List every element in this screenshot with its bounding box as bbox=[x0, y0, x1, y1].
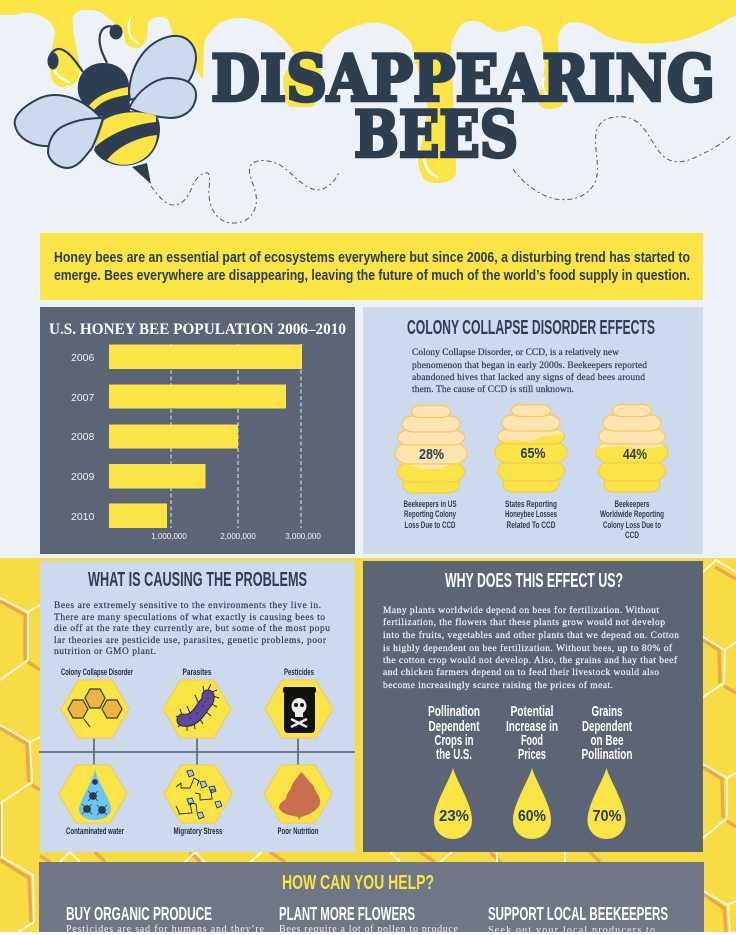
tip: buy organic produce: Pesticides are sad for humans and they’re bbox=[66, 924, 265, 935]
tip: plant more flowers: PLANT MORE FLOWERS bbox=[279, 904, 415, 924]
stat: 70%: Dependent bbox=[582, 718, 632, 735]
stat: 23%: Crops in bbox=[434, 732, 474, 749]
hive 65%: Related To CCD bbox=[506, 520, 556, 531]
stat: 70%: on Bee bbox=[590, 732, 624, 749]
bar chart bbox=[71, 344, 321, 541]
connector lines bbox=[39, 737, 355, 766]
stat: 70% bbox=[582, 703, 632, 839]
hive 65% bbox=[495, 404, 567, 531]
heading: HOW CAN YOU HELP? bbox=[282, 872, 434, 894]
cause: pesticides: Pesticides bbox=[284, 667, 314, 678]
stat: 60%: Potential bbox=[510, 703, 554, 720]
panel: what is causing the problems bbox=[39, 561, 355, 852]
hive 44% bbox=[596, 404, 668, 541]
cause: parasites bbox=[163, 667, 231, 738]
description: Colony Collapse Disorder, or CCD, is a relatively new bbox=[412, 348, 619, 358]
description: fertilization, the flowers that these plants grow would not develop bbox=[383, 617, 665, 628]
description bbox=[412, 348, 647, 395]
cause: contaminated water bbox=[59, 765, 127, 837]
title: BEES bbox=[354, 98, 518, 172]
hive 44%: Colony Loss Due to bbox=[603, 520, 661, 531]
honey highlights bbox=[54, 19, 546, 177]
hive 44%: Worldwide Reporting bbox=[600, 509, 664, 520]
bottom white strip bbox=[0, 932, 736, 935]
intro band bbox=[40, 233, 703, 300]
tip: plant more flowers bbox=[279, 904, 459, 935]
hive 44%: 44% bbox=[623, 446, 647, 463]
hive 28%: 28% bbox=[419, 446, 444, 463]
antennae bbox=[48, 24, 122, 72]
hive 28%: Loss Due to CCD bbox=[404, 520, 456, 531]
description: them. The cause of CCD is still unknown. bbox=[412, 384, 574, 395]
description bbox=[383, 605, 679, 691]
bar chart: 2009 bbox=[71, 471, 95, 483]
stat: 60% bbox=[506, 703, 558, 839]
panel: how can you help bbox=[39, 862, 704, 935]
stinger bbox=[132, 163, 151, 184]
stat: 23%: the U.S. bbox=[436, 746, 472, 763]
stat: 70%: Pollination bbox=[582, 746, 632, 763]
description: Bees are extremely sensitive to the environments they live in. bbox=[54, 601, 321, 611]
bar chart: 2006 bbox=[71, 352, 95, 364]
hive 44%: CCD bbox=[625, 530, 639, 541]
stat: 60%: Increase in bbox=[506, 718, 558, 735]
stat: 70%: Grains bbox=[592, 703, 622, 720]
description: and chicken farmers depend on to feed their livestock would also bbox=[383, 667, 659, 678]
tip: buy organic produce bbox=[66, 904, 265, 935]
cause: poor nutrition: Poor Nutrition bbox=[278, 826, 319, 837]
description: There are many speculations of what exactly is causing bees to bbox=[54, 612, 325, 623]
cause: migratory stress: Migratory Stress bbox=[174, 826, 222, 837]
wings left bbox=[15, 95, 103, 168]
bar chart: 1,000,000 bbox=[151, 532, 187, 541]
tip: plant more flowers: Bees require a lot of pollen to produce bbox=[279, 924, 459, 935]
heading: WHAT IS CAUSING THE PROBLEMS bbox=[88, 569, 307, 591]
thorax bbox=[78, 63, 130, 118]
description: become increasingly scarce raising the prices of meat. bbox=[383, 680, 613, 691]
hive 44%: Beekeepers bbox=[614, 499, 650, 510]
chart title: U.S. HONEY BEE POPULATION 2006–2010 bbox=[49, 321, 346, 338]
icon: bee bbox=[15, 24, 196, 184]
cause: colony collapse disorder bbox=[61, 667, 133, 738]
hive 65%: 65% bbox=[520, 445, 546, 462]
description: nutrition or GMO plant. bbox=[54, 647, 156, 657]
cause: parasites: Parasites bbox=[182, 667, 212, 678]
description: phenomenon that began in early 2000s. Beekeepers reported bbox=[412, 361, 647, 371]
description: Many plants worldwide depend on bees for fertilization. Without bbox=[383, 605, 659, 616]
honeycomb background bbox=[0, 558, 736, 932]
panel: bee population chart bbox=[40, 307, 355, 554]
honey drips bbox=[0, 0, 736, 183]
stat: 23%: Pollination bbox=[428, 703, 480, 720]
panel: why does this effect us bbox=[363, 561, 703, 852]
hive 28%: Reporting Colony bbox=[404, 509, 456, 520]
hive 28% bbox=[395, 406, 467, 531]
cause: contaminated water: Contaminated water bbox=[66, 826, 124, 837]
heading: WHY DOES THIS EFFECT US? bbox=[445, 570, 623, 592]
stat: 23%: Dependent bbox=[428, 718, 480, 735]
description: the cotton crop would not develop. Also, the grains and hay that beef bbox=[383, 655, 678, 666]
panel: colony collapse disorder effects bbox=[363, 307, 703, 554]
cause: poor nutrition bbox=[264, 765, 332, 837]
bar chart: 2008 bbox=[71, 431, 95, 443]
hive 65%: Honeybee Losses bbox=[505, 509, 557, 520]
stat: 60%: Prices bbox=[518, 746, 546, 763]
hive 28%: Beekeepers in US bbox=[404, 499, 456, 510]
description bbox=[54, 601, 330, 657]
abdomen bbox=[94, 111, 160, 166]
tip: support local beekeepers bbox=[488, 904, 668, 935]
wings right bbox=[129, 36, 196, 118]
cause: colony collapse disorder: Colony Collapse Disorder bbox=[61, 667, 133, 678]
bar chart: 2010 bbox=[71, 511, 95, 523]
bee flight path bbox=[151, 117, 732, 223]
description: lar theories are pesticide use, parasites, genetic problems, poor bbox=[54, 636, 327, 646]
cause: migratory stress bbox=[164, 765, 232, 837]
description: is highly dependent on bee fertilization. Without bees, up to 80% of bbox=[383, 643, 673, 654]
hive 65%: States Reporting bbox=[505, 499, 557, 510]
tip: buy organic produce: BUY ORGANIC PRODUCE bbox=[66, 904, 212, 924]
bar chart: 2007 bbox=[71, 392, 95, 404]
description: die off at the rate they currently are, but some of the most popu bbox=[54, 623, 330, 634]
stat: 60%: Food bbox=[521, 732, 543, 749]
bar chart: 2,000,000 bbox=[220, 532, 256, 541]
title bbox=[211, 42, 715, 172]
cause: pesticides bbox=[265, 667, 333, 738]
stat: 60%: 60% bbox=[518, 808, 546, 825]
bar chart: 3,000,000 bbox=[285, 532, 321, 541]
description: abandoned hives that lacked any signs of dead bees around bbox=[412, 372, 645, 383]
stat: 23% bbox=[428, 703, 480, 839]
description: into the fruits, vegetables and other plants that we depend on. Cotton bbox=[383, 630, 679, 641]
stat: 70%: 70% bbox=[592, 808, 622, 825]
stat: 23%: 23% bbox=[439, 808, 469, 825]
